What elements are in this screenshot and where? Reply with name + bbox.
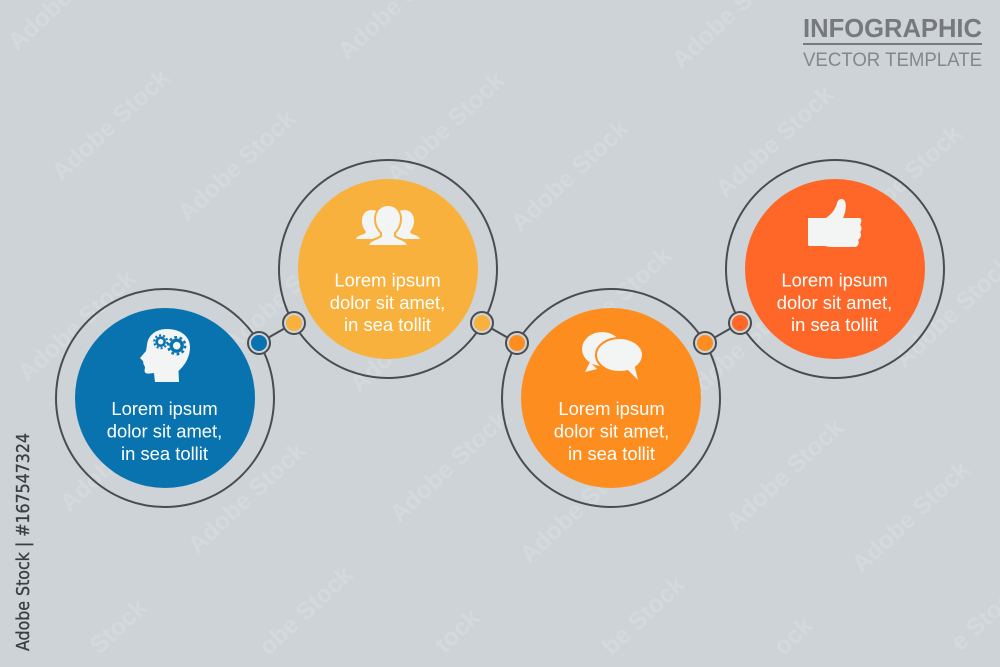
node: orange right — [694, 332, 716, 354]
text: step 1: dolor sit amet, — [107, 420, 222, 442]
watermark pattern: Adobe Stock — [549, 242, 677, 364]
connector: orange to red — [705, 323, 740, 343]
watermark pattern: Adobe Stock — [721, 414, 849, 536]
panel: step 2 yellow — [279, 160, 497, 378]
watermark pattern: Adobe Stock — [173, 105, 301, 227]
node: orange left — [506, 332, 528, 354]
title block — [803, 13, 982, 71]
watermark pattern: ock — [769, 612, 819, 661]
text: step 2: in sea tollit — [344, 314, 431, 335]
icon: group of people — [356, 205, 420, 246]
watermark pattern: Adobe Stock — [55, 395, 183, 517]
panel: step 1 blue — [56, 289, 274, 507]
stock id label: Adobe Stock | #167547324 — [14, 433, 34, 651]
watermark pattern: Adobe Stock — [345, 276, 473, 398]
watermark pattern: Adobe Stock — [13, 265, 141, 387]
watermark pattern: Stock — [85, 594, 153, 659]
watermark pattern: Adobe Stock — [47, 64, 175, 186]
watermark pattern: Adobe Stock — [847, 456, 975, 578]
icon: thumbs up — [808, 199, 862, 247]
watermark pattern: Adobe Stock — [839, 120, 967, 242]
text: step 1: Lorem ipsum — [111, 398, 218, 419]
watermark pattern: Adobe Stock — [382, 67, 510, 189]
text: step 3: Lorem ipsum — [558, 398, 665, 419]
watermark pattern: Adobe Stock — [506, 115, 634, 237]
text: step 4: Lorem ipsum — [781, 270, 888, 290]
text: step 3: in sea tollit — [568, 443, 655, 464]
node: yellow left — [283, 312, 305, 334]
node: yellow right — [471, 312, 493, 334]
text: step 4: in sea tollit — [791, 314, 878, 335]
node: red — [729, 312, 751, 334]
watermark pattern: obe Stock — [254, 561, 358, 661]
node: blue — [248, 332, 270, 354]
watermark pattern: tock — [430, 604, 485, 658]
panel: step 3 orange — [502, 289, 720, 507]
watermark pattern: Adobe Stock — [677, 287, 805, 409]
text: step 4: dolor sit amet, — [777, 292, 892, 313]
watermark pattern: be Stock — [597, 571, 690, 661]
connector: blue to yellow — [259, 323, 294, 343]
text: step 1: in sea tollit — [121, 443, 208, 464]
watermark pattern: Adobe Stock — [219, 235, 347, 357]
watermark pattern: Adobe Stock — [711, 81, 839, 203]
icon: head with gears — [140, 329, 190, 382]
connector: yellow to orange — [482, 323, 517, 343]
text: step 2: dolor sit amet, — [330, 292, 445, 313]
watermark pattern: Adobe Stock — [515, 447, 643, 569]
watermark pattern: Adobe Stock — [385, 406, 513, 528]
title block: VECTOR TEMPLATE — [803, 49, 982, 71]
panel: step 4 red — [726, 160, 944, 378]
text: step 3: dolor sit amet, — [554, 420, 669, 442]
text: step 2: Lorem ipsum — [334, 270, 441, 290]
title block: INFOGRAPHIC — [803, 13, 982, 43]
icon: speech bubbles — [582, 332, 643, 380]
watermark pattern: Adobe Stock — [183, 437, 311, 559]
